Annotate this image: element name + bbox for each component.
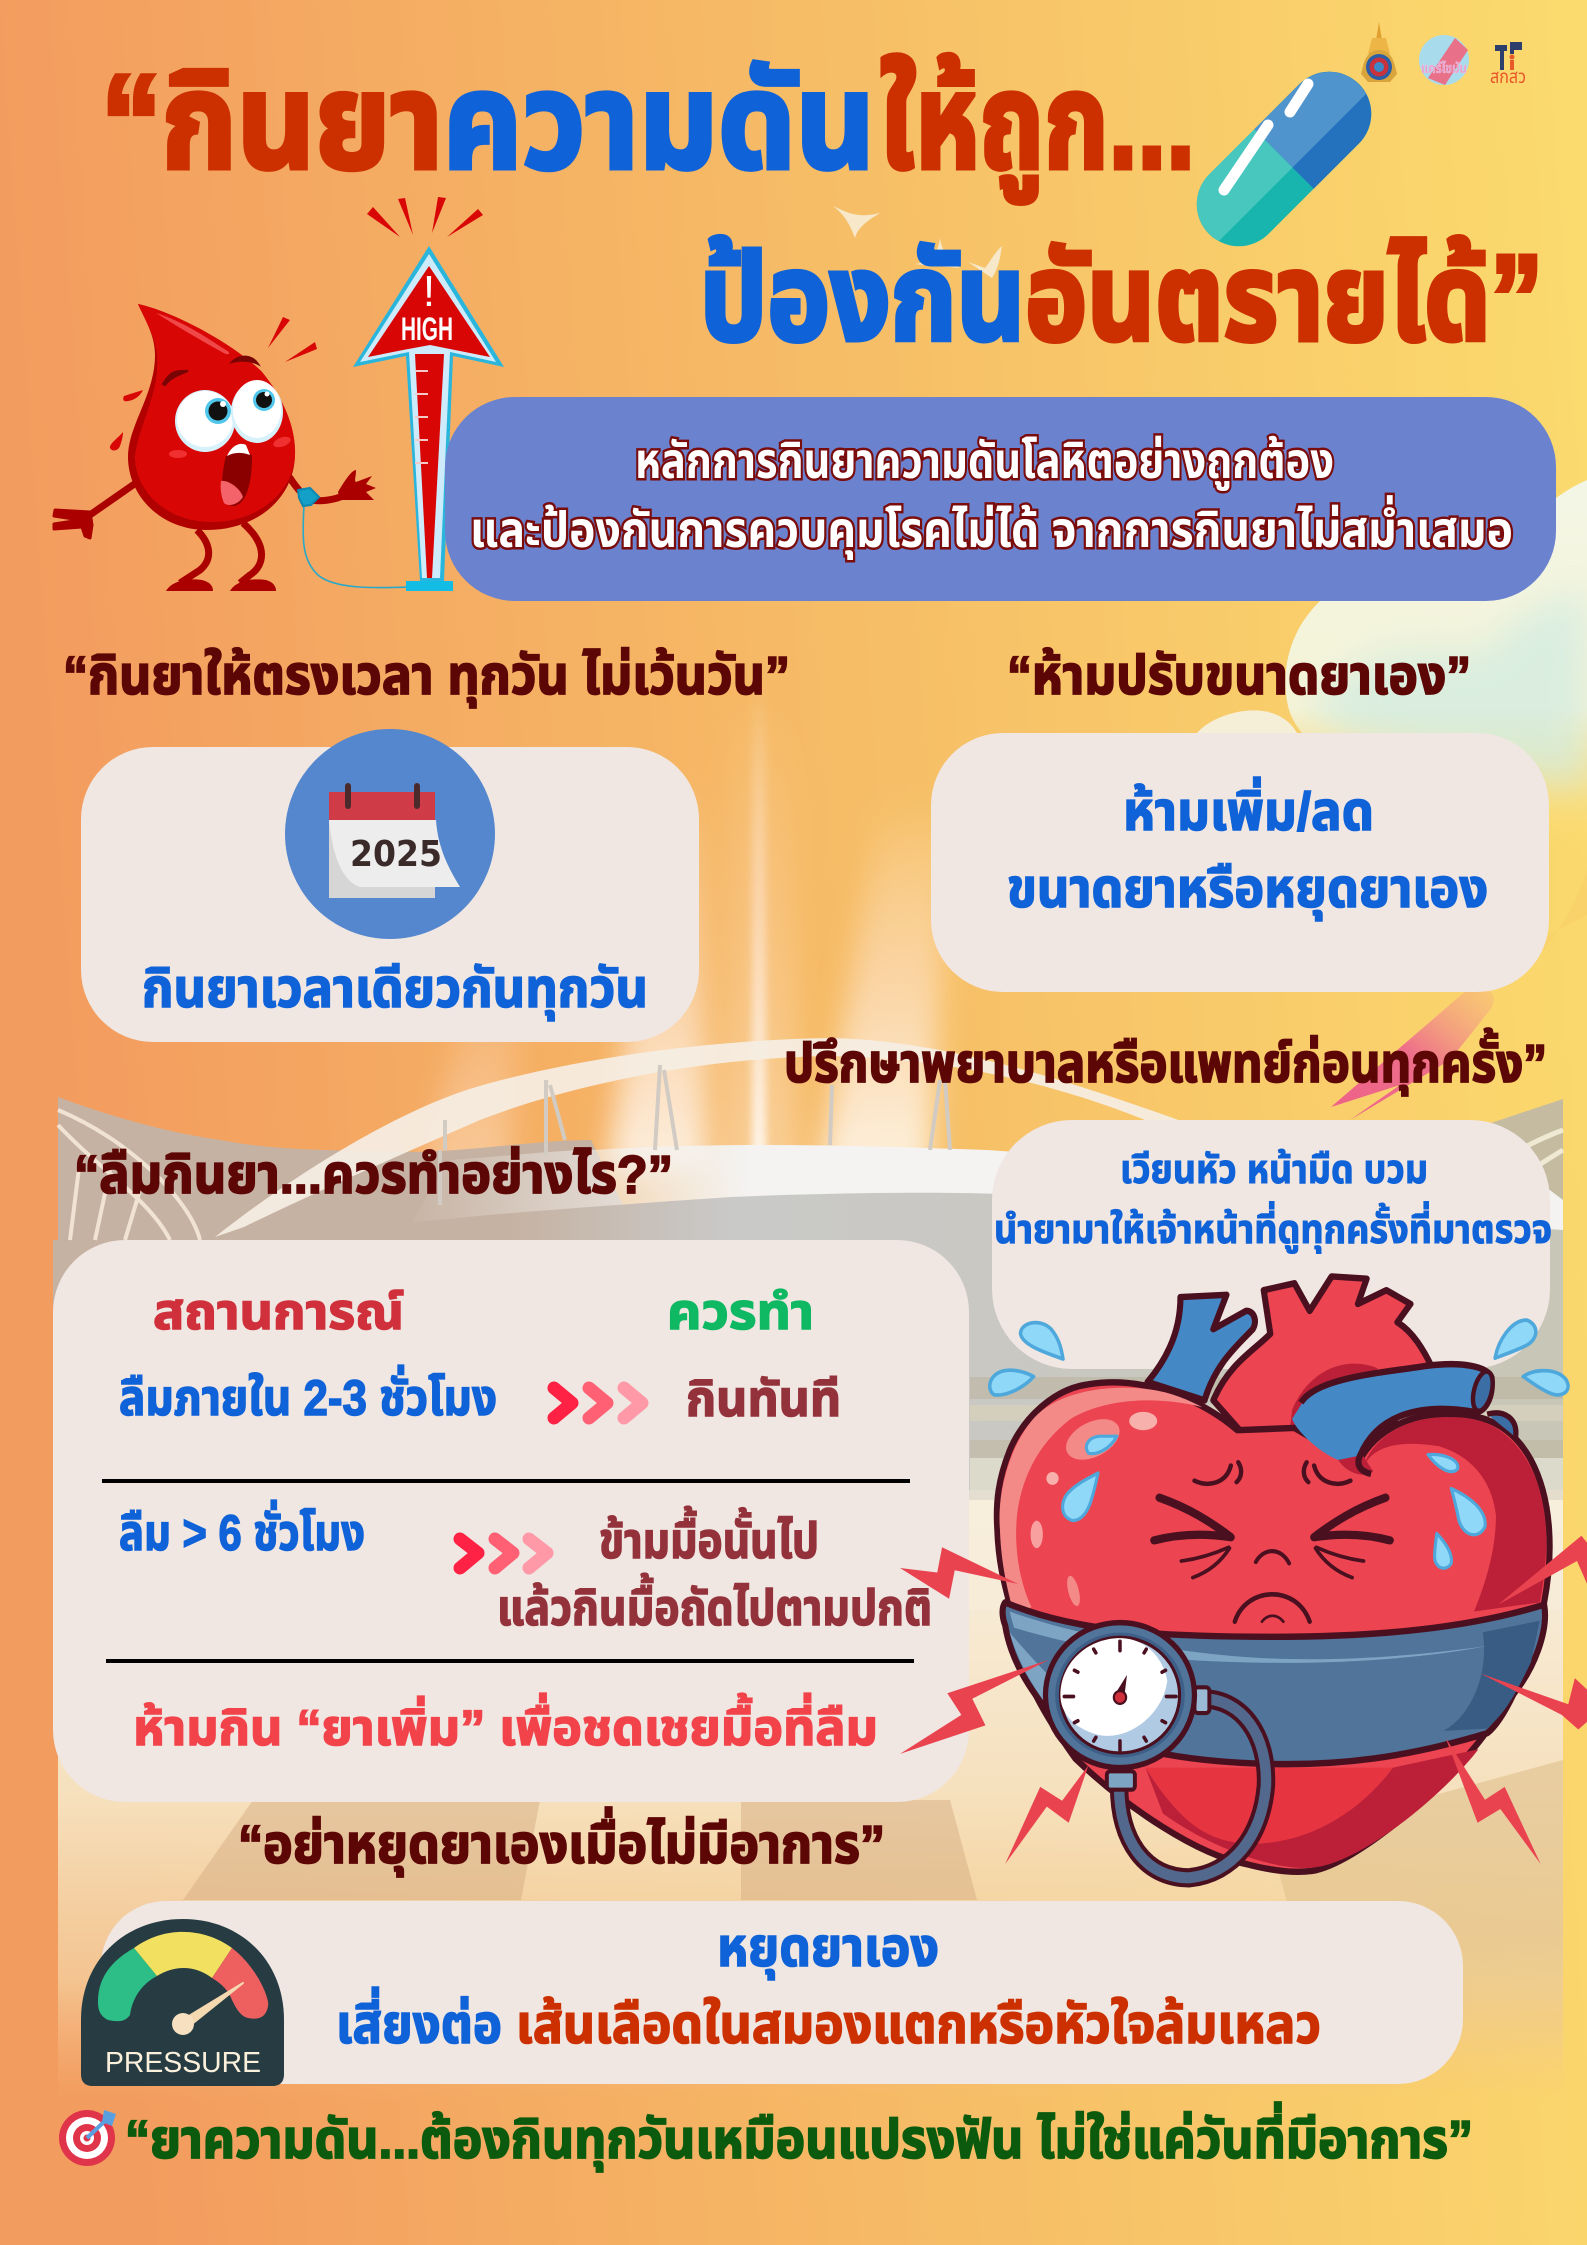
heading: do not stop: “อย่าหยุดยาเองเมื่อไม่มีอาการ” <box>238 1807 885 1877</box>
background: clouds <box>1197 480 1587 997</box>
title line 1 <box>101 48 1195 203</box>
heading: forgot: “ลืมกินยา...ควรทำอย่างไร?” <box>74 1145 673 1205</box>
upper heart <box>1213 1276 1432 1437</box>
panel: missed dose table: กินทันที <box>686 1371 841 1427</box>
character: blood drop <box>54 304 376 591</box>
title line 1: “กินยา <box>101 48 443 197</box>
panel: symptoms card <box>992 1120 1552 1369</box>
gauge dial <box>1045 1623 1209 1790</box>
character: stressed heart <box>900 1276 1587 1878</box>
panel: stopping medicine risk: เส้นเลือดในสมองแตกหรือหัวใจล้มเหลว <box>516 1995 1321 2055</box>
sweat drops on face <box>1063 1436 1485 1568</box>
panel: no dose change card <box>931 733 1549 992</box>
blue vein <box>1148 1295 1255 1400</box>
panel: same time card: กินยาเวลาเดียวกันทุกวัน <box>142 959 648 1021</box>
panel: intro banner: หลักการกินยาความดันโลหิตอย่างถูกต้อง <box>635 433 1334 491</box>
panel: missed dose table <box>53 1240 969 1802</box>
title line 1: ความดัน <box>443 48 875 197</box>
tube <box>1119 1699 1266 1878</box>
panel: no dose change card: ขนาดยาหรือหยุดยาเอง <box>1007 859 1488 921</box>
background: sun rays <box>420 680 950 1170</box>
logo: research fund <box>1490 42 1526 88</box>
background: pink streak <box>1331 989 1494 1120</box>
background: stadium <box>53 1038 1563 2100</box>
panel: stopping medicine risk: หยุดยาเอง <box>717 1918 939 1980</box>
heading: on time: “กินยาให้ตรงเวลา ทุกวัน ไม่เว้นวัน” <box>63 646 790 708</box>
icon: chevrons <box>554 1388 642 1418</box>
panel: missed dose table: ควรทำ <box>667 1284 814 1340</box>
face <box>1154 1462 1390 1622</box>
icon: pressure gauge: PRESSURE <box>105 2047 261 2079</box>
logo: royal crest <box>1361 22 1397 82</box>
panel: missed dose table: ข้ามมื้อนั้นไป <box>599 1506 819 1569</box>
icon: high pressure arrow meter: HIGH <box>401 311 453 347</box>
icon: chevrons second row <box>460 1539 547 1568</box>
panel: same time card <box>81 729 699 1042</box>
title line 2: ป้องกัน <box>700 230 1025 366</box>
panel: missed dose table: แล้วกินมื้อถัดไปตามปกติ <box>497 1573 932 1636</box>
panel: no dose change card: ห้ามเพิ่ม/ลด <box>1123 777 1374 842</box>
heart body <box>997 1382 1550 1872</box>
aorta <box>1338 1451 1373 1475</box>
panel: intro banner <box>445 397 1556 601</box>
birds <box>833 206 1002 278</box>
title line 1: ให้ถูก... <box>880 48 1195 203</box>
panel: missed dose table: ลืม > 6 ชั่วโมง <box>119 1500 365 1561</box>
sweat drops outside <box>990 1320 1568 1395</box>
logo: research fund: สกสว <box>1490 67 1526 88</box>
cuff belt <box>1003 1602 1545 1764</box>
panel: symptoms card: เวียนหัว หน้ามืด บวม <box>1120 1147 1428 1192</box>
icon: target <box>59 2110 116 2166</box>
icon: calendar <box>285 729 495 939</box>
logo: circle badge <box>1419 35 1469 85</box>
cuff and tube <box>298 488 410 588</box>
panel: stopping medicine risk <box>101 1901 1463 2084</box>
logo: circle badge: แคร์ไขมัน <box>1421 60 1467 76</box>
icon: high pressure arrow meter: ! <box>423 267 435 316</box>
panel: missed dose table: ห้ามกิน “ยาเพิ่ม” เพื่อชดเชยมื้อที่ลืม <box>133 1693 878 1756</box>
panel: missed dose table: ลืมภายใน 2-3 ชั่วโมง <box>119 1365 497 1426</box>
panel: stopping medicine risk: เสี่ยงต่อ <box>336 1987 502 2055</box>
icon: capsule pill <box>1179 54 1389 264</box>
burst marks <box>367 197 483 237</box>
heading: do not adjust dose: “ห้ามปรับขนาดยาเอง” <box>1007 646 1471 706</box>
lightning bolts <box>900 1536 1587 1864</box>
icon: calendar: 2025 <box>350 834 442 875</box>
logos top right <box>1361 22 1526 88</box>
panel: missed dose table: สถานการณ์ <box>153 1284 404 1340</box>
icon: pressure gauge <box>81 1919 284 2086</box>
icon: high pressure arrow meter <box>353 197 504 591</box>
closing message: “ยาความดัน...ต้องกินทุกวันเหมือนแปรงฟัน ไม่ใช่แค่วันที่มีอาการ” <box>125 2102 1473 2172</box>
title line 2 <box>700 230 1543 366</box>
